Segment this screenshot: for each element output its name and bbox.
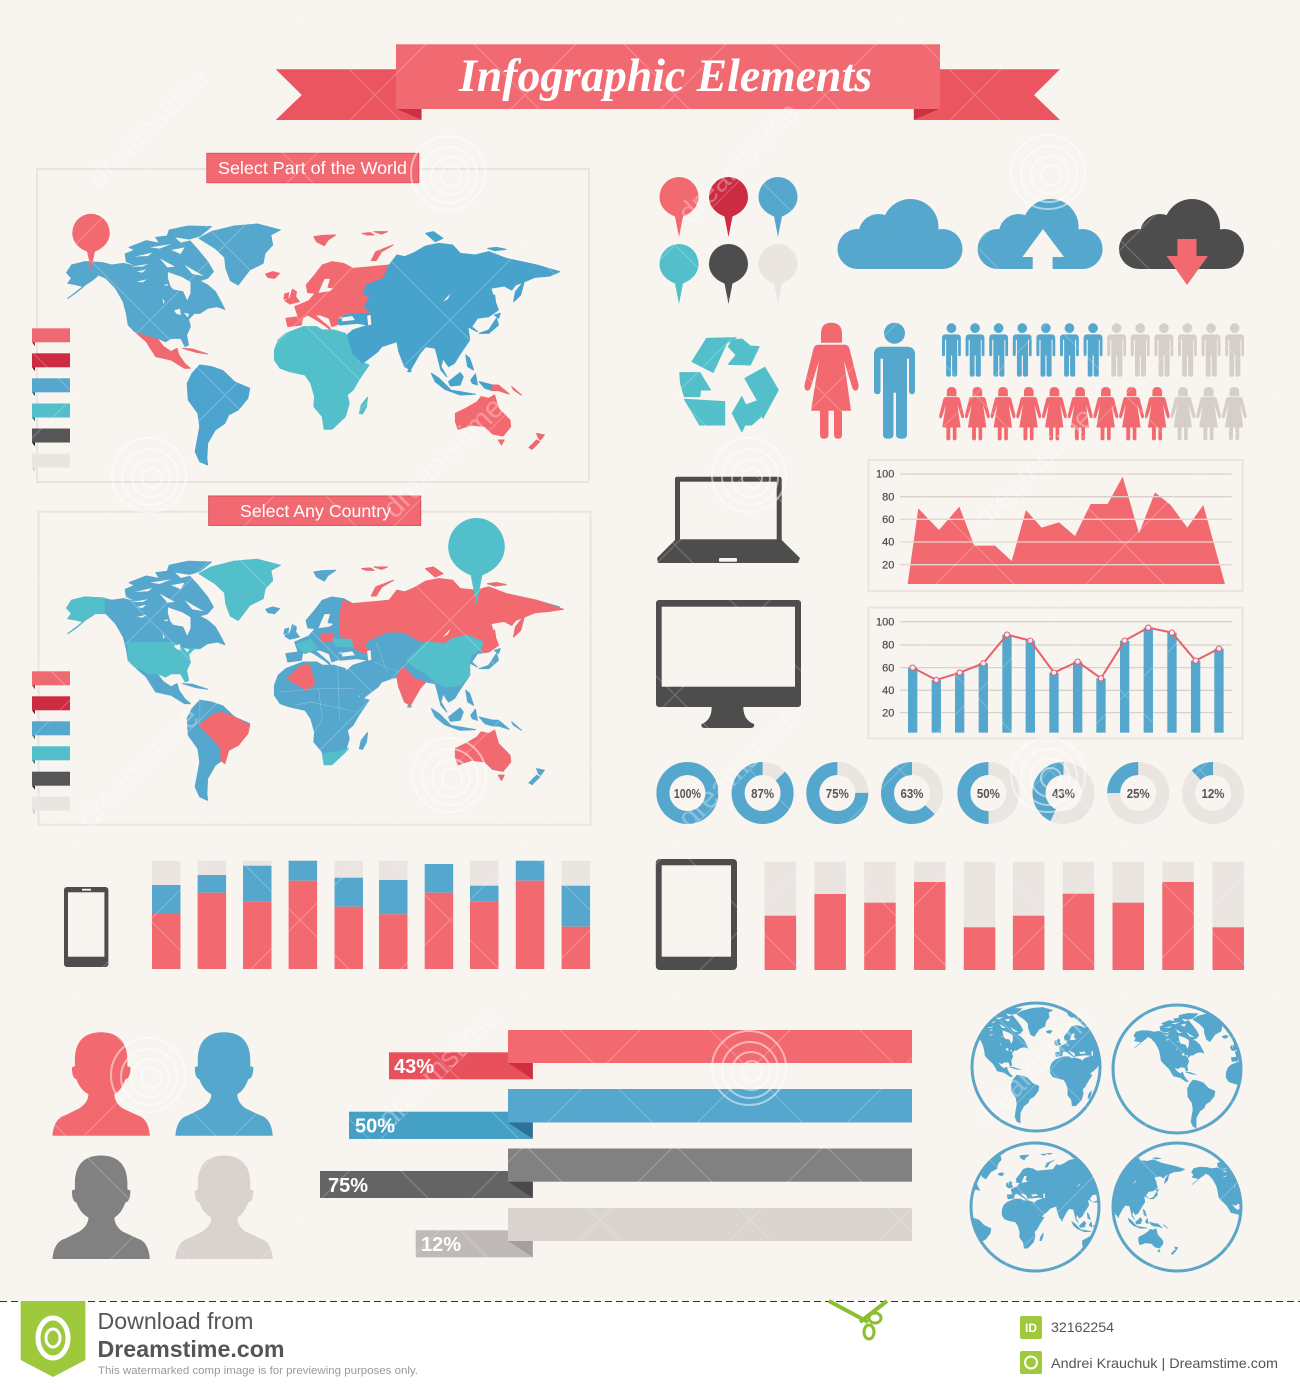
ribbon 75% (320, 1148, 912, 1198)
donut 43% (1039, 768, 1088, 818)
title: Infographic Elements (458, 50, 872, 102)
axis labels: 40 (882, 537, 894, 549)
donut 100% (663, 768, 712, 818)
watermark text: dreamstime (372, 1001, 506, 1135)
ID badge: ID (1025, 1321, 1037, 1335)
donut 75%: 75% (826, 786, 849, 801)
axis labels: 60 (882, 662, 894, 674)
icon: woman (804, 323, 859, 439)
globe: Atlantic (970, 1002, 1102, 1132)
axis labels: 80 (882, 640, 894, 652)
donut 87%: 87% (751, 786, 774, 801)
icon: laptop (657, 477, 800, 563)
globe: Eurasia and Africa (970, 1142, 1100, 1272)
world map by country (67, 559, 563, 800)
avatar: red (52, 1032, 150, 1136)
author badge (1020, 1351, 1042, 1374)
watermark text: dreamstime (672, 701, 806, 835)
footer note: This watermarked comp image is for previewing purposes only. (98, 1365, 418, 1377)
title ribbon (276, 44, 1060, 120)
ribbon 43%: 43% (394, 1056, 434, 1078)
bar chart (765, 862, 1244, 970)
legend tags (32, 671, 70, 815)
icon: cloud (838, 199, 962, 269)
icon: scissors (829, 1301, 887, 1339)
map pin (448, 518, 505, 605)
map heading (209, 496, 421, 525)
watermark text: dreamstime (967, 401, 1101, 535)
icon: map pins (660, 177, 798, 304)
map heading: Select Any Country (240, 501, 391, 521)
stacked bar chart (152, 861, 590, 969)
icon: desktop monitor (656, 600, 801, 728)
footer brand: Dreamstime.com (98, 1336, 284, 1362)
icon: cloud download (1119, 199, 1244, 285)
donut 25% (1114, 768, 1163, 818)
donut charts (663, 768, 1238, 818)
icon: man (874, 323, 915, 439)
area series (908, 477, 1225, 584)
icon: cloud upload (978, 199, 1103, 269)
ribbon 12% (416, 1208, 912, 1257)
axis labels: 20 (882, 707, 894, 719)
watermark spirals (111, 135, 1085, 1112)
panel: bar and line chart (868, 608, 1243, 738)
watermark text: dreamstime (967, 1001, 1101, 1135)
donut 12%: 12% (1202, 786, 1225, 801)
ID badge (1020, 1316, 1042, 1339)
bars (908, 628, 1224, 733)
icon: tablet (656, 859, 737, 970)
watermark text (72, 61, 1101, 1135)
globe: Pacific (1112, 1142, 1242, 1272)
world map by continent (67, 224, 560, 465)
donut 75% (813, 768, 862, 818)
watermark text: dreamstime (72, 701, 206, 835)
grid lines (900, 474, 1232, 565)
icon: phone (64, 887, 108, 967)
axis labels: 100 (876, 469, 894, 481)
image id: 32162254 (1051, 1319, 1114, 1335)
data points (910, 625, 1222, 683)
donut 50% (964, 768, 1013, 818)
axis labels: 60 (882, 514, 894, 526)
watermark text: dreamstime (672, 96, 806, 230)
donut 12% (1188, 768, 1238, 818)
author credit: Andrei Krauchuk | Dreamstime.com (1051, 1355, 1278, 1371)
ribbon 50% (349, 1089, 912, 1139)
grid lines (900, 622, 1232, 713)
watermark text: dreamstime (82, 61, 216, 195)
map heading (207, 153, 419, 183)
pictogram: men row (942, 323, 1244, 377)
legend tags (32, 328, 70, 472)
footer (0, 1301, 1300, 1390)
map heading: Select Part of the World (218, 158, 407, 178)
avatar: blue (175, 1032, 273, 1136)
panel: select part of the world map (32, 153, 589, 482)
donut 100%: 100% (674, 786, 701, 801)
donut 63%: 63% (900, 786, 924, 801)
donut 43%: 43% (1052, 786, 1075, 801)
donut 87% (738, 768, 787, 818)
line series (913, 628, 1219, 680)
avatar: light (175, 1156, 273, 1259)
axis labels: 20 (882, 559, 894, 571)
avatar: grey (52, 1156, 150, 1259)
axis labels: 80 (882, 491, 894, 503)
axis labels (876, 469, 894, 571)
donut 50%: 50% (977, 786, 1000, 801)
panel: select any country map (32, 496, 590, 825)
axis labels: 100 (876, 616, 894, 628)
icon: recycle (680, 338, 778, 432)
ribbon 75%: 75% (328, 1175, 368, 1197)
ribbon 43% (389, 1030, 912, 1079)
donut 63% (888, 768, 936, 818)
footer heading: Download from (98, 1308, 254, 1334)
axis labels (876, 616, 894, 719)
watermark text: dreamstime (377, 391, 511, 525)
pictogram: women row (939, 387, 1247, 440)
ribbon 12%: 12% (421, 1234, 461, 1256)
panel: area chart (868, 460, 1243, 591)
donut 25%: 25% (1127, 786, 1150, 801)
icon: dreamstime badge (21, 1301, 85, 1377)
globe: Americas (1112, 1004, 1242, 1134)
ribbon 50%: 50% (355, 1116, 395, 1138)
axis labels: 40 (882, 685, 894, 697)
map pin (72, 214, 110, 271)
